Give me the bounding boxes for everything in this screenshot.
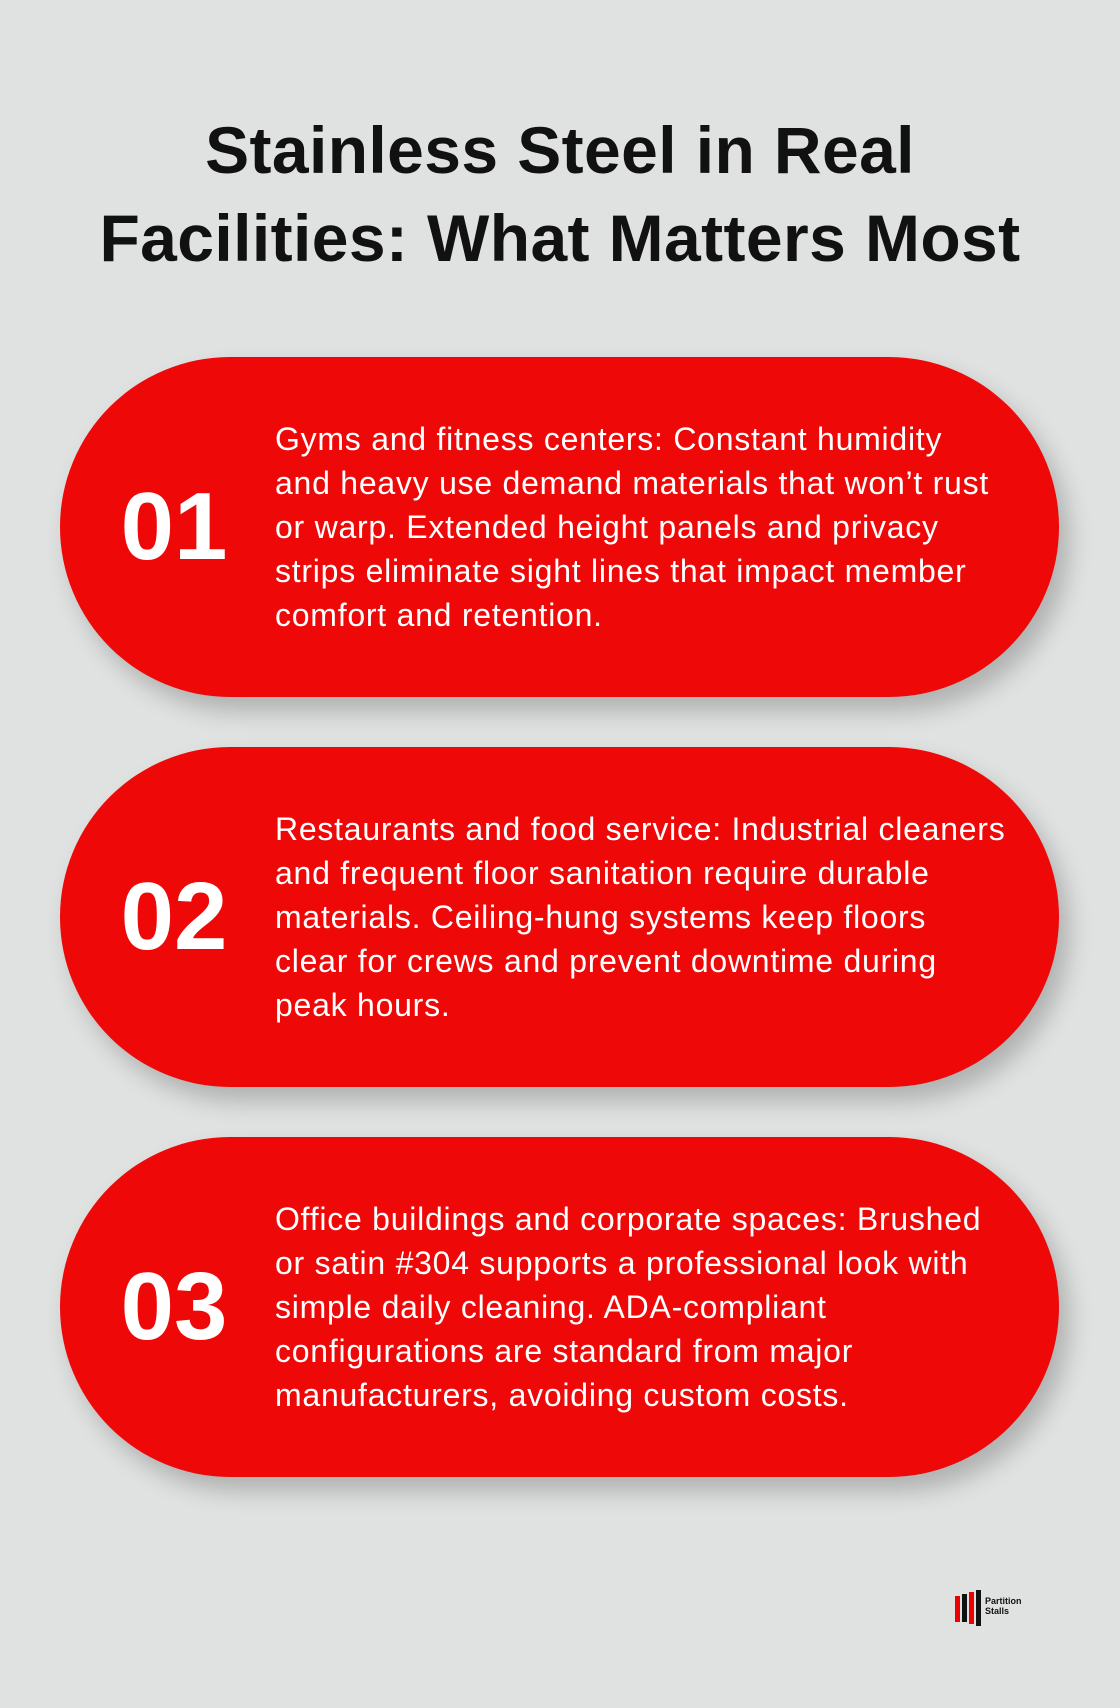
- text: restaurants: peak hours.: [275, 987, 450, 1023]
- panel: gyms: [60, 357, 1059, 697]
- logo: Stalls: [985, 1606, 1009, 1616]
- text: gyms: [275, 421, 989, 633]
- title: Stainless Steel in Real: [205, 113, 915, 187]
- title: Facilities: What Matters Most: [99, 201, 1021, 275]
- text: restaurants: and frequent floor sanitation require durable: [275, 855, 930, 891]
- text: restaurants: clear for crews and prevent downtime during: [275, 943, 937, 979]
- text: restaurants: [275, 811, 1005, 1023]
- text: offices: or satin #304 supports a professional look with: [275, 1245, 968, 1281]
- text: gyms: comfort and retention.: [275, 597, 603, 633]
- title: [99, 113, 1021, 275]
- text: offices: configurations are standard from major: [275, 1333, 853, 1369]
- text: offices: manufacturers, avoiding custom costs.: [275, 1377, 849, 1413]
- text: gyms: or warp. Extended height panels and privacy: [275, 509, 939, 545]
- text: offices: [275, 1201, 981, 1413]
- text: restaurants: Restaurants and food service: Industrial cleaners: [275, 811, 1005, 847]
- panel: offices: [60, 1137, 1059, 1477]
- text: offices: simple daily cleaning. ADA-compliant: [275, 1289, 827, 1325]
- number 03: 03: [121, 1253, 227, 1360]
- logo: Partition: [985, 1596, 1022, 1606]
- text: gyms: Gyms and fitness centers: Constant humidity: [275, 421, 942, 457]
- panel: restaurants: [60, 747, 1059, 1087]
- number 02: 02: [121, 863, 227, 970]
- text: gyms: strips eliminate sight lines that impact member: [275, 553, 966, 589]
- text: offices: Office buildings and corporate spaces: Brushed: [275, 1201, 981, 1237]
- logo: [955, 1590, 1022, 1626]
- number 01: 01: [121, 473, 227, 580]
- text: restaurants: materials. Ceiling-hung systems keep floors: [275, 899, 926, 935]
- text: gyms: and heavy use demand materials that won’t rust: [275, 465, 989, 501]
